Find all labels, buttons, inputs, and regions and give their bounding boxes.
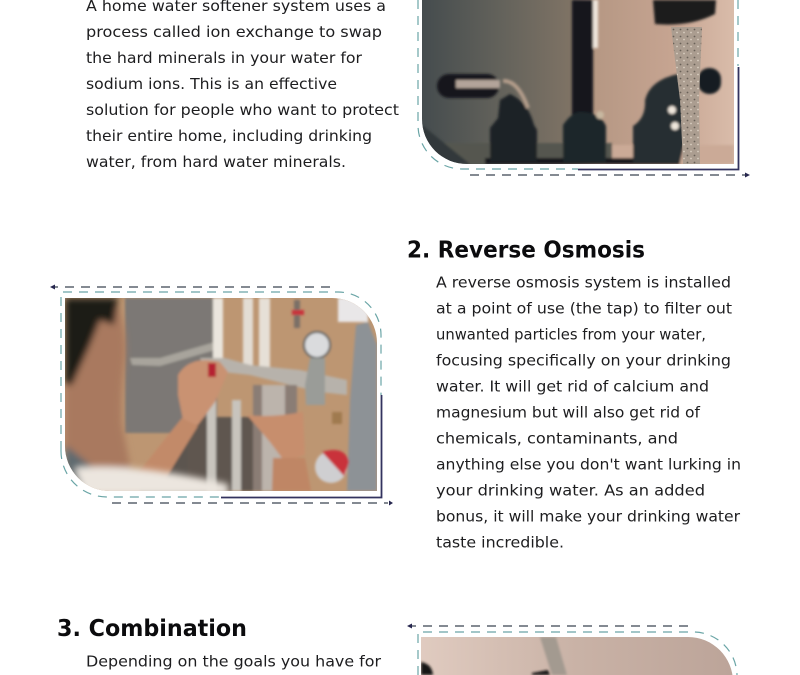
text block: reverse osmosis description xyxy=(436,274,741,552)
heading: 2. Reverse Osmosis: 2. Reverse Osmosis xyxy=(407,236,645,264)
heading: 3. Combination: 3. Combination xyxy=(57,614,247,642)
frame: dashed border around combination photo xyxy=(407,624,737,675)
text block: reverse osmosis description: unwanted particles from your water, xyxy=(436,326,706,344)
text block: combination description: Depending on the goals you have for xyxy=(86,652,382,670)
photo: combination system xyxy=(421,637,733,675)
text block: water softener description: the hard minerals in your water for xyxy=(86,49,363,67)
text block: reverse osmosis description: A reverse osmosis system is installed xyxy=(436,274,731,292)
frame: dashed border around faucet photo xyxy=(418,0,750,178)
text block: reverse osmosis description: anything else you don't want lurking in xyxy=(436,456,741,474)
text block: reverse osmosis description: focusing specifically on your drinking xyxy=(436,352,731,370)
text block: reverse osmosis description: taste incredible. xyxy=(436,534,564,552)
text block: water softener description: their entire home, including drinking xyxy=(86,127,372,145)
text block: reverse osmosis description: magnesium but will also get rid of xyxy=(436,404,701,422)
text block: water softener description: sodium ions. This is an effective xyxy=(86,75,337,93)
photo: plumber installing a filter xyxy=(65,298,377,495)
text block: reverse osmosis description: water. It will get rid of calcium and xyxy=(436,378,709,396)
text block: water softener description: solution for people who want to protect xyxy=(86,101,399,119)
photo: running faucet xyxy=(422,0,734,164)
text block: water softener description: water, from hard water minerals. xyxy=(86,153,346,171)
text block: reverse osmosis description: chemicals, contaminants, and xyxy=(436,430,678,448)
text block: reverse osmosis description: bonus, it will make your drinking water xyxy=(436,508,741,526)
text block: reverse osmosis description: at a point of use (the tap) to filter out xyxy=(436,300,732,318)
text block: water softener description: process called ion exchange to swap xyxy=(86,23,382,41)
frame: dashed border around plumber photo xyxy=(50,284,393,506)
text block: water softener description xyxy=(86,0,399,171)
text block: reverse osmosis description: your drinking water. As an added xyxy=(436,482,705,500)
